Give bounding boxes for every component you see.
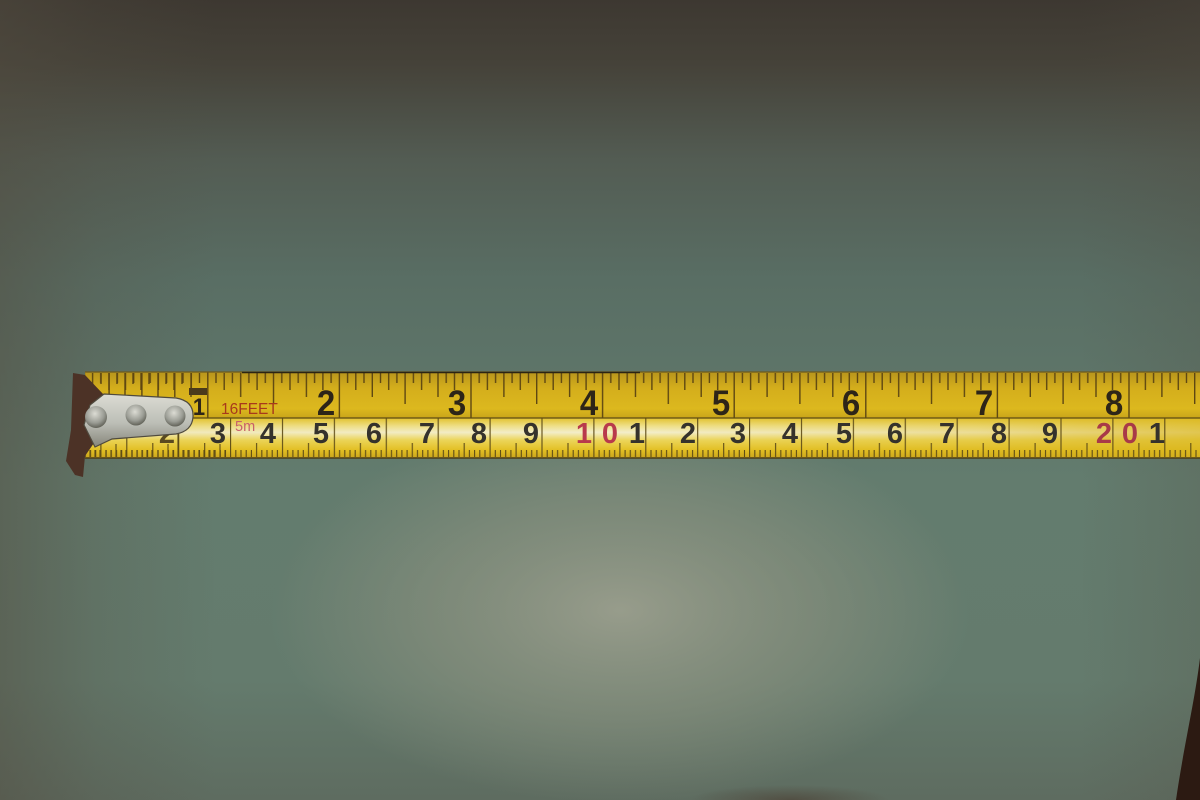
metric centimetre numbers: 5 <box>836 418 852 450</box>
capacity label: 16 feet: 16FEET <box>221 401 278 418</box>
metric centimetre numbers: 3 <box>210 418 226 450</box>
imperial inch numbers: 2 <box>317 384 335 423</box>
imperial scale band <box>85 372 1200 418</box>
imperial inch numbers: 4 <box>580 384 598 423</box>
rivets <box>85 404 186 428</box>
metric centimetre numbers: 8 <box>471 418 487 450</box>
imperial inch numbers: 5 <box>712 384 730 423</box>
metal end hook <box>66 373 193 477</box>
metric centimetre numbers: 3 <box>730 418 746 450</box>
metric centimetre numbers: 9 <box>523 418 539 450</box>
metric centimetre numbers <box>159 418 1165 450</box>
metric centimetre numbers: 4 <box>782 418 798 450</box>
metric centimetre numbers: 2 <box>159 418 175 450</box>
metric centimetre numbers: 6 <box>366 418 382 450</box>
metric centimetre numbers: 1 <box>576 418 592 450</box>
imperial inch numbers: 3 <box>448 384 466 423</box>
metric centimetre numbers: 7 <box>419 418 435 450</box>
metric centimetre numbers: 2 <box>680 418 696 450</box>
imperial inch numbers: 7 <box>975 384 993 423</box>
metric centimetre numbers: 7 <box>939 418 955 450</box>
metric centimetre numbers: 9 <box>1042 418 1058 450</box>
metric scale band <box>85 418 1200 458</box>
steel rivet plate <box>84 394 193 447</box>
metric centimetre numbers: 0 <box>602 418 618 450</box>
imperial inch numbers: 1 <box>193 393 205 420</box>
metric centimetre numbers: 5 <box>313 418 329 450</box>
metric centimetre numbers: 4 <box>260 418 276 450</box>
metric centimetre numbers: 6 <box>887 418 903 450</box>
imperial inch numbers: 6 <box>842 384 860 423</box>
tape measure blade <box>85 372 1200 458</box>
imperial inch numbers <box>193 384 1123 423</box>
imperial inch numbers: 8 <box>1105 384 1123 423</box>
metric centimetre numbers: 1 <box>629 418 645 450</box>
mark above inch one <box>189 388 207 395</box>
hook upright <box>66 373 104 477</box>
capacity label: 5 m: 5m <box>235 419 255 435</box>
metric centimetre numbers: 1 <box>1149 418 1165 450</box>
metric centimetre numbers: 2 <box>1096 418 1112 450</box>
metric centimetre numbers: 8 <box>991 418 1007 450</box>
metric centimetre numbers: 0 <box>1122 418 1138 450</box>
dark object at lower right corner <box>1176 658 1200 800</box>
